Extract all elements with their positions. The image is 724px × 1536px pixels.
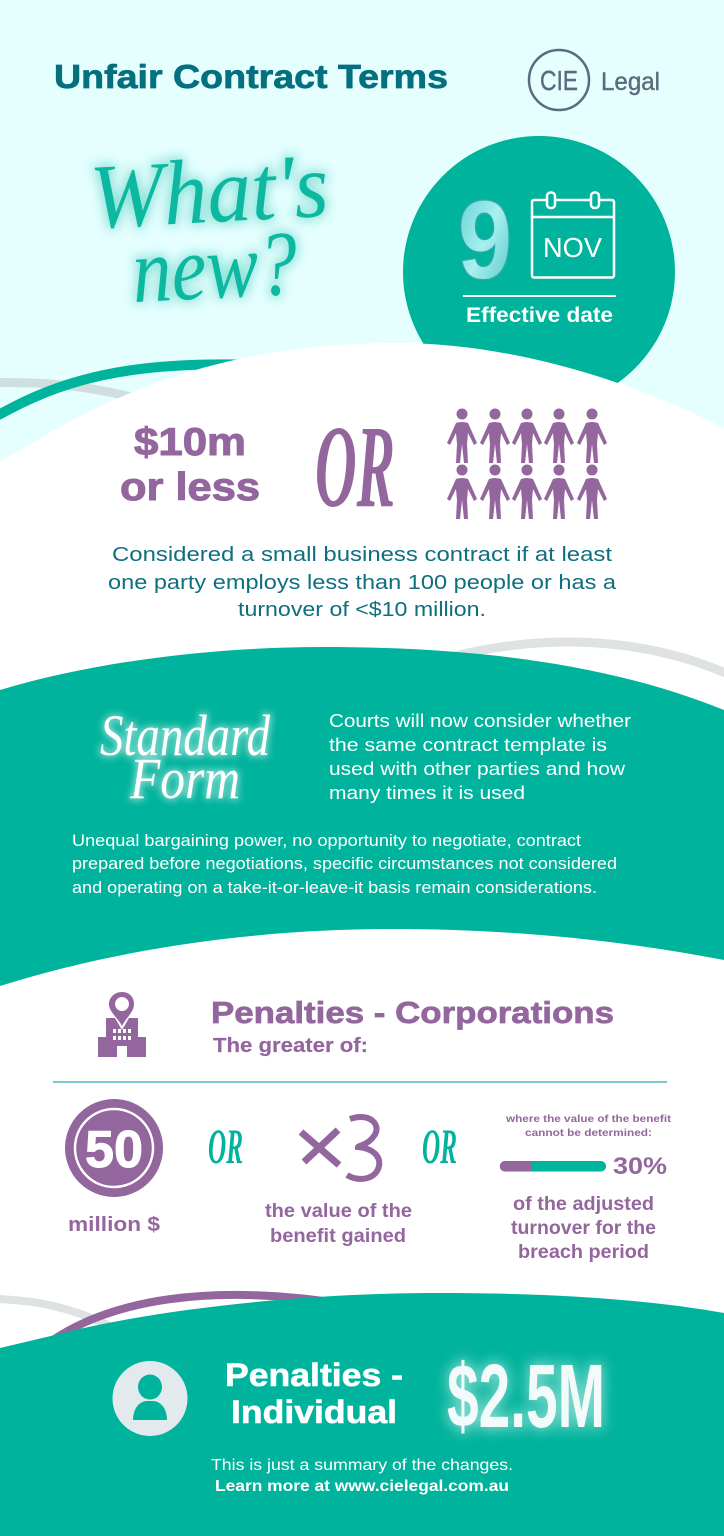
amount: $2.5M	[447, 1347, 605, 1447]
heading: What's new?	[88, 134, 335, 324]
amount: $2.5M: $2.5M	[447, 1347, 605, 1447]
panel: standard form	[0, 647, 724, 986]
heading: penalties individual: Penalties -	[225, 1357, 403, 1393]
progress bar 30 percent	[500, 1161, 606, 1172]
logo: CIE Legal: CIE	[540, 65, 578, 96]
amount: $2.5M: $2.5M	[447, 1347, 605, 1447]
turnover label: breach period	[518, 1242, 649, 1263]
gray arc lower left	[0, 1299, 110, 1326]
note: cannot be determined:	[525, 1128, 652, 1139]
icon: calendar	[532, 192, 614, 278]
badge: 50 million: 50	[85, 1121, 143, 1179]
benefit label: the value of the	[265, 1201, 412, 1222]
small business description: turnover of <$10 million.	[238, 599, 486, 621]
threshold: $10m or less	[120, 421, 260, 509]
calendar month: NOV	[543, 232, 602, 263]
considerations text: and operating on a take-it-or-leave-it basis remain considerations.	[72, 878, 597, 897]
teal arc top left	[0, 364, 280, 417]
note	[505, 1114, 672, 1139]
balloon number nine: 9	[458, 179, 512, 302]
note: where the value of the benefit	[505, 1114, 672, 1125]
turnover block: 30%	[613, 1153, 667, 1180]
small business description	[108, 544, 617, 621]
infographic canvas: OR	[315, 401, 395, 532]
heading: Standard Form: Form	[129, 746, 240, 811]
heading: Standard Form: Standard	[100, 703, 271, 768]
panel: penalties individual	[0, 1293, 724, 1536]
logo: CIE Legal: Legal	[601, 68, 660, 96]
courts text: many times it is used	[329, 782, 525, 803]
considerations text: prepared before negotiations, specific circumstances not considered	[72, 854, 617, 873]
badge: 50 million	[65, 1099, 163, 1236]
multiplier: times 3	[265, 1117, 412, 1247]
courts text: used with other parties and how	[329, 758, 626, 779]
footer text: This is just a summary of the changes.	[211, 1457, 513, 1474]
small business description: one party employs less than 100 people or has a	[108, 572, 617, 594]
courts text: the same contract template is	[329, 734, 607, 755]
heading: What's new?: new?	[130, 212, 300, 322]
gray arc mid right	[455, 642, 724, 675]
turnover label: of the adjusted	[513, 1194, 654, 1215]
courts text: Courts will now consider whether	[329, 710, 631, 731]
icon: building with location pin	[98, 992, 146, 1057]
balloon number nine: 9	[458, 179, 512, 302]
OR script teal 1: OR	[208, 1118, 243, 1174]
considerations text	[72, 831, 617, 897]
heading: penalties individual: Individual	[231, 1394, 397, 1430]
heading: penalties corporations	[211, 995, 614, 1057]
turnover label: turnover for the	[511, 1218, 656, 1239]
footer text: Learn more at www.cielegal.com.au	[215, 1478, 509, 1495]
purple arc lower	[50, 1295, 350, 1342]
courts text	[329, 710, 631, 803]
heading: What's new?: new?	[130, 212, 300, 322]
title: Unfair Contract Terms	[54, 58, 448, 95]
heading: Standard Form	[100, 703, 271, 811]
turnover block	[500, 1114, 672, 1263]
heading: penalties corporations: Penalties - Corporations	[211, 995, 614, 1030]
heading: penalties individual	[225, 1357, 403, 1430]
icon: group of ten people	[447, 408, 607, 519]
heading: Standard Form: Form	[129, 746, 240, 811]
considerations text: Unequal bargaining power, no opportunity to negotiate, contract	[72, 831, 581, 850]
threshold: $10m or less: or less	[120, 466, 260, 509]
turnover label	[511, 1194, 656, 1263]
icon: person	[112, 1361, 188, 1436]
badge: 50 million: million $	[68, 1214, 160, 1236]
heading: penalties corporations: The greater of:	[213, 1035, 368, 1057]
threshold: $10m or less: $10m	[134, 421, 246, 464]
benefit label	[265, 1201, 412, 1247]
benefit label: benefit gained	[270, 1226, 406, 1247]
heading: Standard Form: Standard	[100, 703, 271, 768]
effective date label: Effective date	[466, 304, 613, 327]
heading: What's new?: What's	[88, 134, 331, 248]
footer text	[211, 1457, 513, 1495]
panel: white small business section	[0, 343, 724, 1400]
small business description: Considered a small business contract if at least	[112, 544, 613, 566]
gray arc top left	[0, 382, 150, 402]
panel: effective date	[403, 136, 675, 408]
OR script teal 2: OR	[422, 1118, 457, 1174]
logo: CIE Legal	[529, 50, 660, 110]
heading: What's new?: What's	[88, 134, 331, 248]
